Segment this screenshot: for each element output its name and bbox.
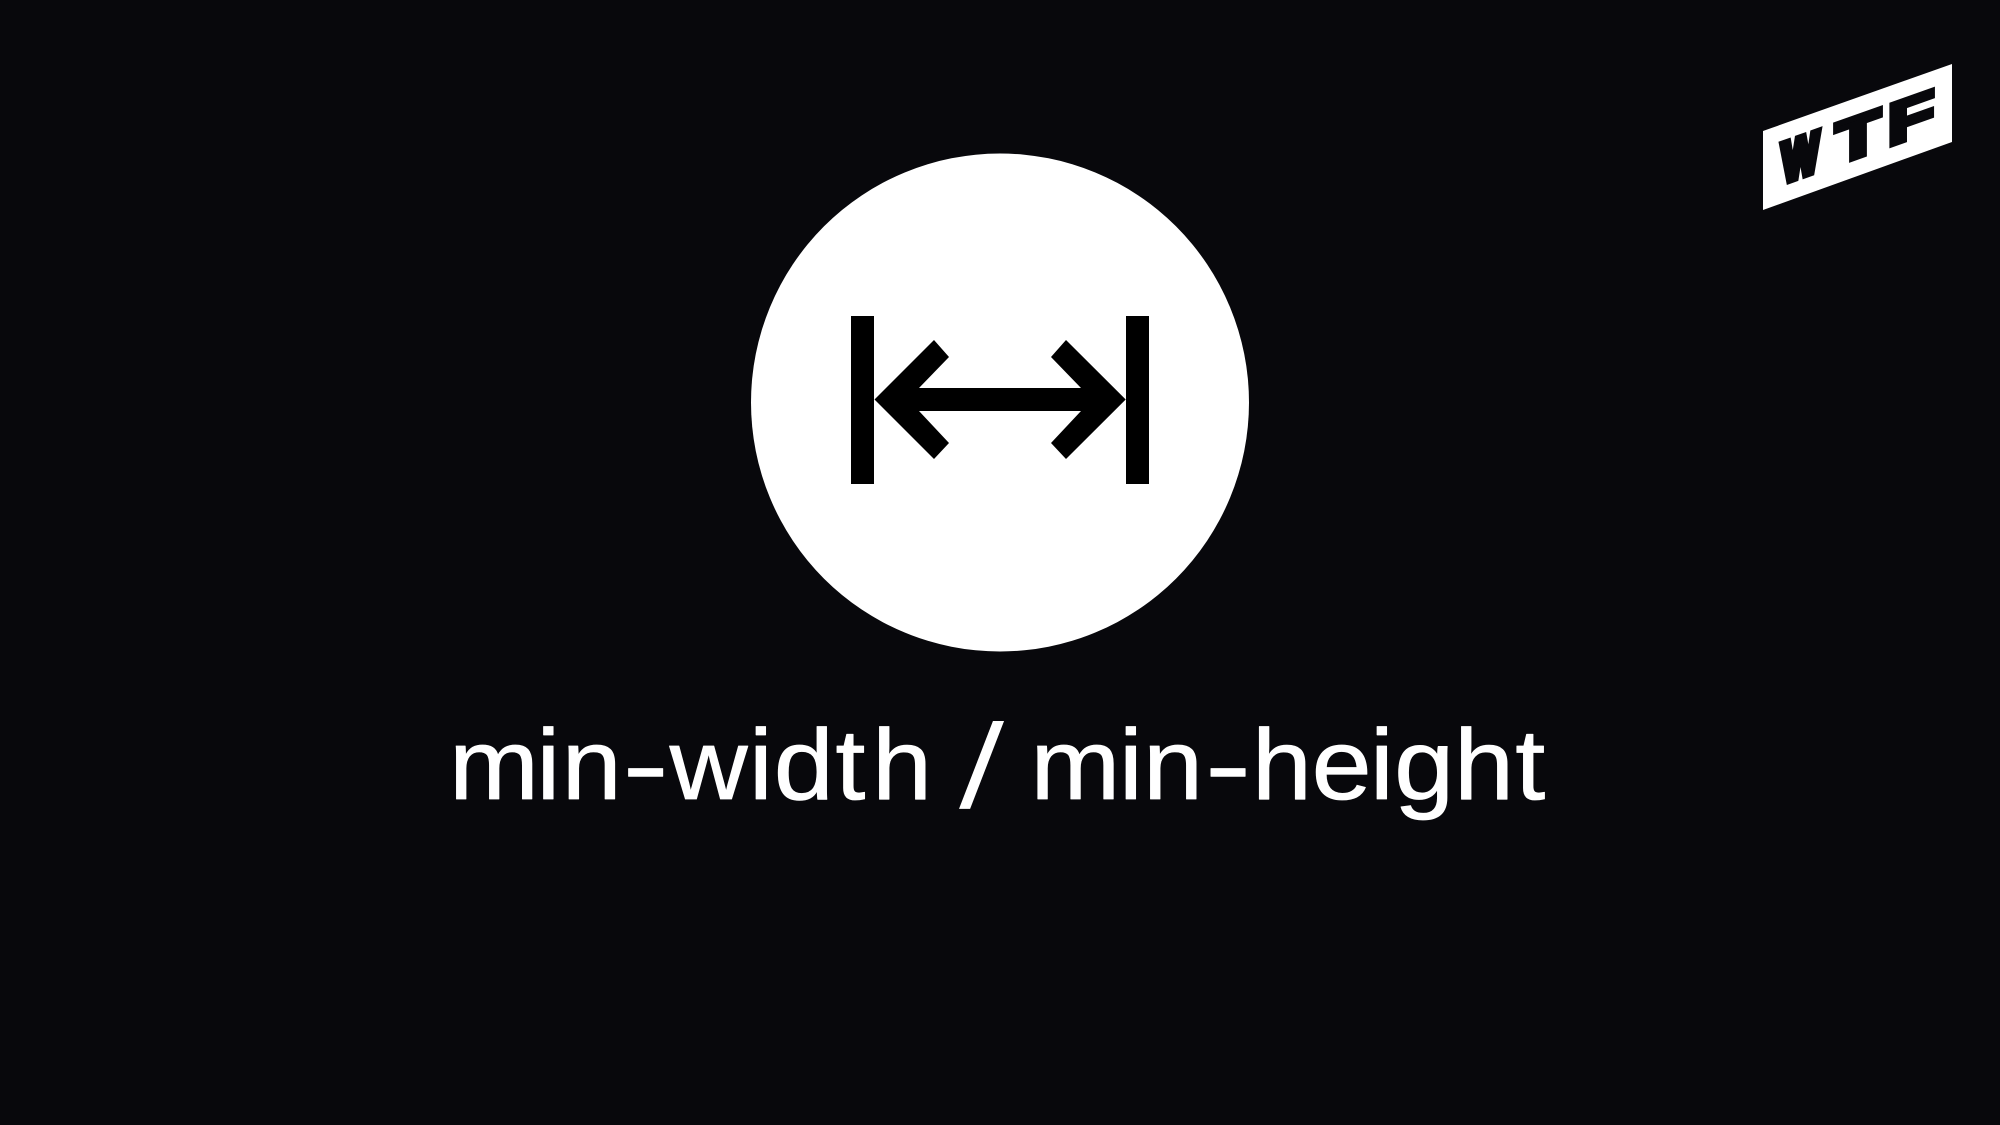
title text: - [1205,708,1251,820]
title text: width [669,710,932,821]
title text: height [1252,710,1545,821]
title text: min [449,710,622,821]
title text: - [622,708,669,820]
icon: right boundary bar [1126,316,1149,484]
icon: double-headed arrow [874,340,1126,459]
icon: left boundary bar [851,316,874,484]
logo: WTF badge [1763,64,1952,210]
title text: / [959,700,1004,825]
logo: WTF badge: F [1888,77,1934,159]
title text: min [1030,710,1203,821]
title text [449,700,1545,825]
logo: WTF badge: W [1782,121,1819,194]
logo: WTF badge: T [1836,97,1880,177]
icon: white circle with min-width arrow [751,154,1249,652]
